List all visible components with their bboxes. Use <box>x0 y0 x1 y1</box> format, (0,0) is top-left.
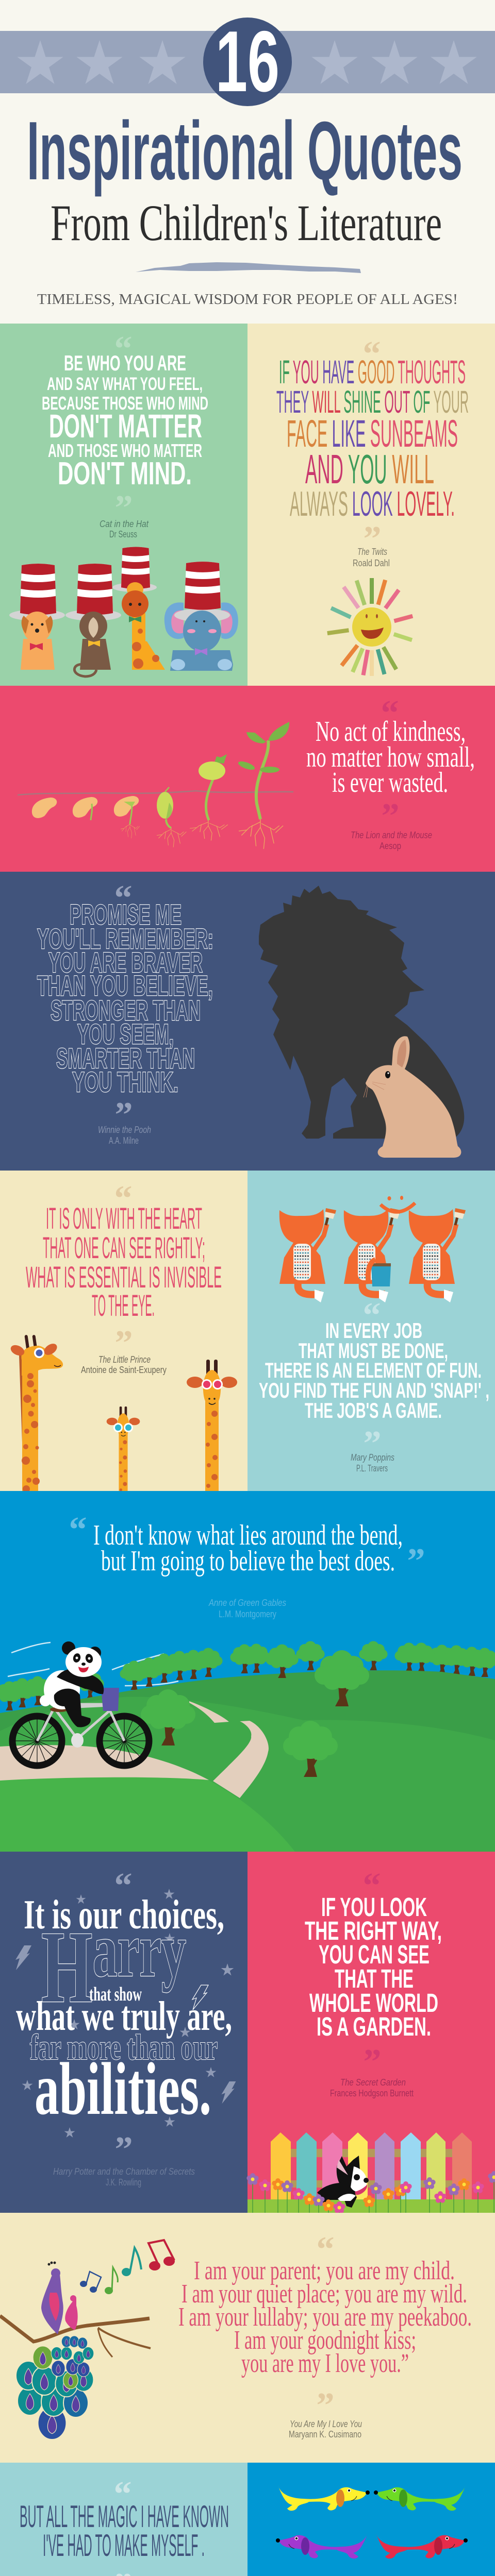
quote text: AND YOU WILL <box>305 446 434 492</box>
closing quote mark: ” <box>363 519 382 559</box>
panel: Cat in the Hat <box>0 324 248 686</box>
attribution: You Are My I Love You <box>290 2419 362 2429</box>
quote text: far more than our <box>30 2028 218 2067</box>
peacocks on branch <box>0 2262 151 2439</box>
text: I'VE HAD TO MAKE MYSELF . <box>43 2528 205 2563</box>
attribution: The Little Prince <box>98 1354 151 1365</box>
quote text <box>276 353 469 523</box>
big tree 1 <box>315 1650 369 1706</box>
panel: Harry Potter <box>0 1852 248 2213</box>
elephant <box>164 562 238 671</box>
flowers <box>246 2171 495 2213</box>
attribution <box>351 1452 394 1473</box>
quote text <box>20 2499 229 2563</box>
four dachshunds <box>276 2485 468 2558</box>
text: IT IS ONLY WITH THE HEART <box>46 1202 202 1235</box>
giraffe <box>112 547 165 670</box>
seed 4 <box>157 787 186 847</box>
seed 3 <box>114 796 140 838</box>
panel: Mary Poppins <box>248 1171 495 1491</box>
attribution: The Lion and the Mouse <box>351 830 432 840</box>
attribution <box>98 1125 151 1146</box>
big tree 3 <box>283 1721 338 1777</box>
attribution: P.L. Travers <box>356 1463 388 1473</box>
opening quote mark: “ <box>114 1866 132 1906</box>
opening quote mark: “ <box>114 1179 132 1218</box>
quote text: It is our choices, <box>24 1892 224 1938</box>
lion silhouette <box>259 886 464 1139</box>
attribution: Anne of Green Gables <box>208 1598 286 1608</box>
panel: Happy Birthday to You <box>248 2463 495 2576</box>
quote text: YOU ARE BRAVER <box>48 946 203 978</box>
closing quote mark: ” <box>363 1424 382 1464</box>
tagline: TIMELESS, MAGICAL WISDOM FOR PEOPLE OF ALL AGES! <box>37 291 458 308</box>
text: THAT ONE CAN SEE RIGHTLY; <box>43 1231 205 1265</box>
foxes painting <box>279 1196 466 1302</box>
opening quote mark: “ <box>363 1866 381 1906</box>
middle hill <box>0 1697 495 1852</box>
dog <box>9 564 65 670</box>
paint bucket <box>368 1260 391 1286</box>
attribution: Maryann K. Cusimano <box>289 2429 361 2439</box>
closing quote mark: ” <box>114 2130 133 2170</box>
quote text: arry <box>93 1907 186 1993</box>
attribution: Frances Hodgson Burnett <box>330 2088 414 2098</box>
landscape <box>0 1641 495 1852</box>
attribution <box>351 830 432 851</box>
attribution: Dr Seuss <box>109 529 137 539</box>
seed 2 <box>73 797 97 820</box>
purple dog <box>276 2533 368 2558</box>
panel: The Twits <box>248 324 495 686</box>
text: WHAT IS ESSENTIAL IS INVISIBLE <box>26 1261 222 1294</box>
sun <box>327 578 413 676</box>
attribution: Winnie the Pooh <box>98 1125 151 1135</box>
quote text <box>306 716 475 799</box>
quote text <box>93 1519 403 1577</box>
foreground hill <box>0 1777 295 1852</box>
panel: header <box>0 0 495 324</box>
quote text: YOU SEEM, <box>77 1018 174 1050</box>
brush stroke <box>136 262 361 273</box>
opening quote mark: “ <box>114 878 132 918</box>
number badge: 16 <box>216 13 279 110</box>
attribution <box>330 2077 414 2098</box>
seed 1 <box>32 798 57 818</box>
attribution: Mary Poppins <box>351 1452 394 1463</box>
attribution <box>100 519 149 539</box>
attribution: Cat in the Hat <box>100 519 149 529</box>
quote text: TO THE EYE. <box>92 1289 155 1323</box>
quote text: BECAUSE THOSE WHO MIND <box>42 393 208 414</box>
wind streaks <box>8 1642 178 1686</box>
opening quote mark: “ <box>113 2475 132 2514</box>
fence <box>271 2132 472 2205</box>
quote text: IS A GARDEN. <box>317 2012 431 2041</box>
quote text: what we truly are, <box>16 1994 232 2039</box>
opening quote mark: “ <box>363 1296 381 1335</box>
fox 1 <box>279 1208 336 1302</box>
attribution <box>81 1354 167 1375</box>
panel: Anne of Green Gables <box>0 1491 495 1852</box>
attribution: Aesop <box>380 841 401 851</box>
grass <box>248 2199 495 2213</box>
green dog <box>374 2485 466 2511</box>
quote text <box>37 899 213 1098</box>
quote text: that show <box>89 1984 142 2005</box>
attribution <box>289 2419 362 2439</box>
opening quote mark: “ <box>317 2230 334 2269</box>
quote text: abilities. <box>35 2048 211 2130</box>
attribution: L.M. Montgomery <box>219 1609 276 1619</box>
quote text: YOU THINK. <box>72 1066 178 1098</box>
quote text: STRONGER THAN <box>51 994 201 1026</box>
closing quote mark: ” <box>382 796 399 836</box>
opening quote mark: “ <box>114 329 132 369</box>
quote text: IN EVERY JOB <box>325 1318 422 1343</box>
painted smile <box>381 1196 415 1212</box>
panel: Winnie the Pooh <box>0 872 495 1171</box>
giraffe: small <box>107 1406 140 1498</box>
quote text: YOU CAN SEE <box>319 1940 430 1969</box>
decorative stars and bolts <box>15 1889 236 2138</box>
attribution <box>353 547 390 568</box>
big tree 2 <box>141 1689 195 1745</box>
rabbit <box>364 1036 461 1158</box>
road <box>0 1701 269 1798</box>
closing quote mark: ” <box>363 2042 382 2082</box>
quote text <box>42 351 208 492</box>
attribution <box>53 2166 195 2188</box>
quote text <box>305 1892 442 2041</box>
attribution: A.A. Milne <box>109 1136 139 1146</box>
quote text: DON'T MIND. <box>58 456 192 492</box>
panel: The Lion and the Mouse <box>0 686 495 872</box>
giraffe: large <box>9 1335 63 1493</box>
quote text <box>26 1202 222 1323</box>
quote text: BE WHO YOU ARE <box>64 351 186 375</box>
quote text: YOU'LL REMEMBER: <box>37 923 213 955</box>
seedling 6 <box>237 722 289 849</box>
panel: You Are My I Love You <box>0 2213 495 2463</box>
fox 2 <box>344 1208 401 1302</box>
yellow dog <box>278 2485 370 2511</box>
attribution: Harry Potter and the Chamber of Secrets <box>53 2166 195 2177</box>
attribution: The Twits <box>357 547 387 557</box>
quote text: THAN YOU BELIEVE, <box>37 970 213 1002</box>
seed growth illustration <box>18 722 293 849</box>
quote text: PROMISE ME <box>70 899 182 930</box>
panel: The Secret Garden <box>246 1852 495 2213</box>
quote text: DON'T MATTER <box>49 408 202 445</box>
fox 3 <box>409 1208 466 1302</box>
star band <box>0 31 495 93</box>
closing quote mark: ” <box>114 1324 133 1363</box>
back hill <box>0 1670 495 1852</box>
monkey <box>65 564 121 676</box>
seedling 5 <box>190 754 228 841</box>
attribution <box>208 1598 286 1619</box>
quote text: AND THOSE WHO MATTER <box>48 440 202 461</box>
giraffe: medium <box>187 1360 237 1499</box>
quote text <box>178 2256 472 2378</box>
attribution: The Secret Garden <box>340 2077 406 2088</box>
quote text: IF YOU LOOK <box>321 1892 427 1922</box>
closing quote mark: ” <box>114 488 133 528</box>
opening quote mark: “ <box>363 334 381 374</box>
music notes <box>80 2240 175 2294</box>
attribution: Antoine de Saint-Exupery <box>81 1365 167 1375</box>
boston terrier <box>317 2156 369 2208</box>
background trees <box>0 1641 495 1710</box>
animals in hats <box>9 547 238 676</box>
attribution: Roald Dahl <box>353 558 390 568</box>
red dog <box>376 2533 468 2558</box>
quote text: you are my I love you.” <box>241 2349 409 2378</box>
closing quote mark: ” <box>114 1095 133 1135</box>
panel: Where The Sidewalk Ends <box>0 2463 248 2576</box>
attribution: J.K. Rowling <box>106 2177 141 2188</box>
quote text: SMARTER THAN <box>56 1042 195 1074</box>
quote text <box>16 1892 232 2130</box>
quote text <box>259 1318 489 1422</box>
closing quote mark: ” <box>407 1541 425 1581</box>
panel: The Little Prince <box>0 1171 248 1499</box>
panda on bicycle <box>12 1641 149 1766</box>
quote text: THAT THE <box>335 1964 414 1993</box>
quote text: H <box>41 1910 122 2024</box>
quote text: AND SAY WHAT YOU FEEL, <box>47 374 203 394</box>
closing quote mark: ” <box>317 2386 334 2426</box>
opening quote mark: “ <box>69 1510 87 1550</box>
opening quote mark: “ <box>381 693 399 733</box>
